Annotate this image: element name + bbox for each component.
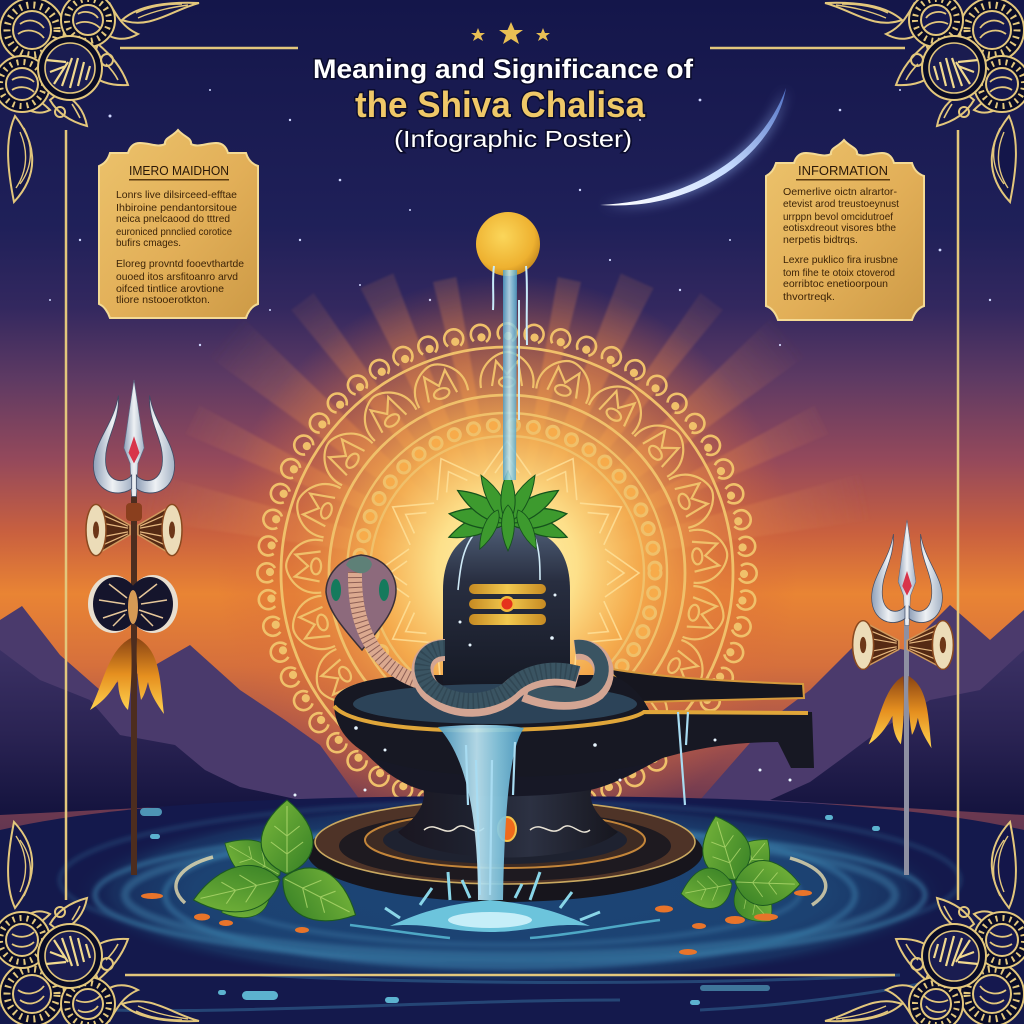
plaque body text: euroniced pnnclied corotice <box>116 226 232 238</box>
sky stars <box>49 89 991 346</box>
plaque heading: INFORMATION <box>798 164 888 178</box>
lingam body <box>443 527 570 684</box>
bowl <box>350 735 690 796</box>
plaque body text: eorribtoc enetioorpoun <box>783 278 888 290</box>
corner ornament top right <box>825 0 1024 202</box>
title <box>313 54 694 152</box>
damaru lower <box>88 575 178 633</box>
pole <box>131 490 137 875</box>
plaque body text: eotisxdreout visores bthe <box>783 222 896 234</box>
leaves right <box>677 809 801 933</box>
leaves left <box>188 800 367 937</box>
plaque shape <box>99 130 258 318</box>
plaque body text: Lexre puklico fira irusbne <box>783 254 898 266</box>
plaque body text: etevist arod treustoeynust <box>783 198 899 210</box>
plaque body text: nerpetis bidtrqs. <box>783 234 858 246</box>
right trident with damaru <box>853 520 953 875</box>
plaque body text: ouoed itos arsfitoanro arvd <box>116 271 238 283</box>
plaque body text: Ihbiroine pendantorsitoue <box>116 202 237 214</box>
damaru upper <box>86 504 182 556</box>
tilak bands <box>469 584 546 625</box>
corner ornament top left <box>0 0 199 202</box>
rope binding <box>126 503 142 521</box>
crescent moon <box>600 88 786 206</box>
droplets on stone <box>294 594 792 796</box>
corner ornament bottom left <box>0 822 199 1024</box>
gold frame lines <box>66 48 958 975</box>
gold mandala <box>215 281 799 865</box>
trident head <box>872 520 942 626</box>
bowl neck <box>398 775 618 858</box>
plaque body text: oifced tintlice arovtione <box>116 283 224 295</box>
panel: left info plaque <box>99 130 258 318</box>
three stars <box>471 22 550 44</box>
mountains <box>0 605 1024 815</box>
water stream from orb <box>493 266 527 480</box>
left trident with damaru <box>86 380 182 875</box>
plaque body text: tom fihe te otoix ctoverod <box>783 267 895 279</box>
panel: right info plaque <box>766 140 924 320</box>
gem <box>498 817 516 841</box>
snake coils <box>422 647 604 706</box>
water pool <box>0 796 1024 1024</box>
plaque heading: IMERO MAIDHON <box>129 164 229 178</box>
damaru <box>853 621 953 669</box>
feathers <box>869 676 932 748</box>
title: Meaning and Significance of <box>313 54 694 84</box>
scroll ornament <box>424 826 590 832</box>
head <box>346 556 372 573</box>
hood <box>326 555 396 650</box>
plaque body text <box>783 186 899 303</box>
plaque body text: neica pnelcaood do tttred <box>116 213 230 225</box>
plaque body text: Eloreg provntd fooevthartde <box>116 258 244 270</box>
corner ornament bottom right <box>825 822 1024 1024</box>
golden orb <box>476 212 540 276</box>
basin water <box>353 684 637 724</box>
lower water streaks <box>140 808 880 1005</box>
plaque body text: Lonrs live dilsirceed-efftae <box>116 189 237 201</box>
cobra <box>326 555 425 684</box>
sun rays <box>140 273 874 596</box>
cream highlight arcs <box>176 857 826 905</box>
leaf crown <box>446 471 570 552</box>
gold rim <box>334 706 808 730</box>
neck <box>355 572 425 684</box>
floating marigold petals <box>141 890 812 955</box>
title: (Infographic Poster) <box>394 126 632 152</box>
yoni body <box>334 675 814 776</box>
yoni spout back <box>606 668 804 702</box>
plaque body text: bufirs cmages. <box>116 237 181 249</box>
trident head <box>93 380 175 496</box>
pole <box>904 620 909 875</box>
heading underline <box>129 179 229 180</box>
plaque body text: urrppn bevol omcidutroef <box>783 211 893 223</box>
heading underline <box>796 179 890 180</box>
plaque body text: thvortreqk. <box>783 291 835 303</box>
feathers <box>90 638 164 714</box>
plaque body text: tliore nstooerotkton. <box>116 294 210 306</box>
base disc <box>307 800 703 902</box>
water cascade and splash <box>350 712 688 938</box>
plaque body text <box>116 189 244 306</box>
shivling <box>294 471 814 902</box>
plaque body text: Oemerlive oictn alrartor- <box>783 186 897 198</box>
title: the Shiva Chalisa <box>355 84 646 125</box>
plaque shape <box>766 140 924 320</box>
central sun glow <box>217 275 797 855</box>
water trickles on lingam <box>458 530 540 590</box>
